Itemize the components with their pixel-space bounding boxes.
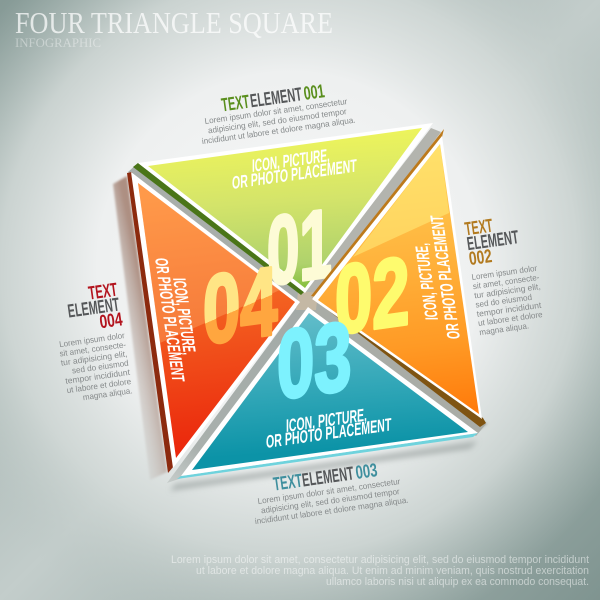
heading 001: TEXT (220, 92, 251, 116)
white frame 1 (138, 123, 433, 293)
heading 004: ELEMENT (66, 295, 121, 323)
label 2 line 1: ICON, PICTURE, (412, 243, 443, 320)
edge: green stripe (133, 163, 305, 295)
fill 1 (148, 128, 422, 288)
label 3 line 2: OR PHOTO PLACEMENT (266, 416, 391, 453)
panel: triangle 3 (177, 300, 478, 479)
white frame 4 (131, 172, 300, 468)
footer text: ullamco laboris nisi ut aliquip ex ea commodo consequat. (326, 576, 589, 588)
heading 003: ELEMENT (301, 463, 356, 491)
body 002: tempor incididunt (476, 300, 542, 319)
heading 001: 001 (302, 81, 326, 105)
body 003: adipisicing elit, sed do eiusmod tempor (260, 486, 400, 515)
label 3 line 1: ICON, PICTURE, (286, 406, 367, 437)
number 03: 03 (277, 300, 351, 420)
body 003: Lorem ipsum dolor sit amet, consectetur (257, 476, 401, 506)
heading 002: TEXT (464, 216, 494, 240)
footer text: Lorem ipsum dolor sit amet, consectetur adipisicing elit, sed do eiusmod tempor incididunt (171, 554, 589, 566)
text block 003 (249, 456, 409, 526)
label 4 line 1: ICON, PICTURE, (168, 278, 199, 355)
heading 003: TEXT (272, 471, 304, 495)
body 003 (251, 475, 409, 526)
fill 4 (138, 183, 295, 458)
body 001: adipisicing elit, sed do eiusmod tempor (207, 106, 347, 135)
body 002: sit amet, consecte- (472, 272, 540, 291)
white frame 2 (312, 136, 482, 419)
subtitle: INFOGRAPHIC (15, 35, 101, 50)
number 01: 01 (267, 188, 332, 306)
label 1 line 2: OR PHOTO PLACEMENT (232, 157, 357, 194)
heading 003: 003 (354, 460, 379, 484)
body 002 (471, 263, 547, 337)
text block 004 (50, 280, 134, 405)
body 004: tur adipisicing elit, (60, 348, 128, 368)
body 001 (198, 95, 356, 146)
heading 001 (220, 81, 326, 116)
number 04: 04 (203, 245, 278, 365)
body 004: sed do eiusmod (71, 358, 129, 376)
heading 002: ELEMENT (466, 227, 520, 255)
fill 2 (318, 144, 479, 414)
body 004: ut labore et dolore (66, 376, 132, 395)
fill 3 (192, 313, 468, 470)
text block 001 (196, 77, 356, 146)
footer text (171, 554, 589, 588)
panel: triangle 4 (127, 172, 300, 473)
panel shadows (113, 176, 488, 491)
edge: dark red stripe (127, 172, 174, 473)
body 002: ut labore et dolore (477, 309, 543, 328)
body 004: tempor incididunt (65, 367, 131, 386)
edge: upper orange stripe (311, 129, 444, 297)
panel: triangle 1 (133, 123, 433, 306)
heading 004 (64, 280, 124, 337)
edge: cyan stripe (177, 433, 478, 479)
title: FOUR TRIANGLE SQUARE (15, 5, 333, 40)
white frame 3 (181, 307, 478, 476)
heading 002 (464, 212, 522, 270)
footer text: ut labore et dolore magna aliqua. Ut enim ad minim veniam, quis nostrud exercitation (196, 565, 589, 577)
gloss 4 (138, 183, 280, 343)
label 2 line 2: OR PHOTO PLACEMENT (428, 215, 465, 339)
body 001: Lorem ipsum dolor sit amet, consectetur (204, 96, 348, 126)
text block 002 (464, 210, 547, 337)
edge: lower brown stripe (312, 297, 486, 427)
gaps between triangles (128, 128, 486, 483)
panel: triangle 2 (311, 129, 486, 427)
body 002: sed do eiusmod (475, 292, 533, 310)
body 002: Lorem ipsum dolor (471, 263, 538, 282)
gloss 2 (353, 144, 449, 257)
body 004 (58, 330, 134, 405)
body 004: Lorem ipsum dolor (59, 330, 125, 349)
heading 001: ELEMENT (249, 84, 304, 112)
heading 004: 004 (98, 308, 124, 333)
body 002: magna aliqua. (479, 320, 530, 337)
body 001: incididunt ut labore et dolore magna aliqua. (201, 115, 356, 146)
body 004: magna aliqua. (82, 385, 133, 402)
body 003: incididunt ut labore et dolore magna aliqua. (254, 495, 409, 526)
heading 003 (272, 460, 379, 495)
body 004: sit amet, consecte- (59, 339, 127, 359)
label 4 line 2: OR PHOTO PLACEMENT (150, 258, 187, 382)
body 002: tur adipisicing elit, (473, 281, 541, 300)
heading 002: 002 (468, 245, 493, 270)
number 02: 02 (335, 235, 409, 355)
label 1 line 1: ICON, PICTURE, (252, 146, 330, 177)
heading 004: TEXT (87, 280, 119, 304)
